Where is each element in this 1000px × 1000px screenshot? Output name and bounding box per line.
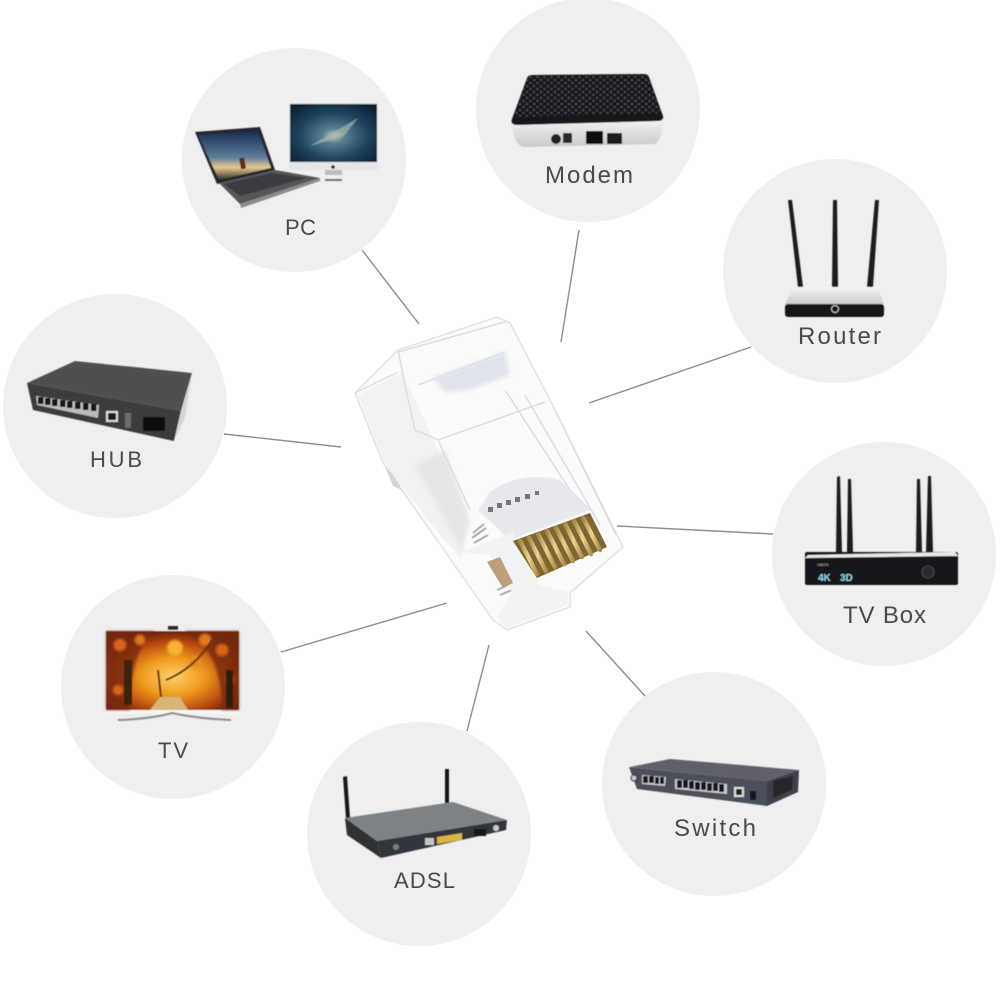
icon: transparent RJ45 connector bbox=[355, 317, 623, 630]
label: Modem: Modem bbox=[545, 162, 633, 189]
clip tab bbox=[385, 467, 402, 490]
label: TV Box: TV Box bbox=[843, 602, 926, 629]
gold contact pins bbox=[513, 513, 607, 578]
panel: Switch bbox=[602, 672, 826, 896]
panel: HUB bbox=[3, 294, 227, 518]
label: TV: TV bbox=[158, 738, 188, 763]
icon: ADSL router bbox=[343, 769, 507, 858]
icon: network switch bbox=[629, 759, 799, 806]
panel: Modem bbox=[476, 0, 700, 222]
panel: ADSL bbox=[307, 722, 531, 946]
side gold contact bbox=[487, 557, 513, 588]
label: ADSL: ADSL bbox=[394, 868, 455, 893]
icon: desktop monitor bbox=[289, 103, 378, 181]
icon: TV box: OBOX bbox=[817, 562, 829, 567]
panel: TV bbox=[61, 575, 285, 799]
icon: TV box: 3D bbox=[840, 573, 853, 584]
upper translucent reflection bbox=[432, 352, 510, 392]
side wires bbox=[472, 524, 512, 595]
panel: PC bbox=[182, 48, 406, 272]
upper housing edges bbox=[355, 322, 616, 535]
contact window bbox=[478, 477, 590, 540]
icon: TV box bbox=[805, 476, 958, 585]
label: Router: Router bbox=[798, 323, 881, 350]
icon: modem bbox=[512, 74, 663, 147]
label: HUB: HUB bbox=[90, 447, 142, 472]
panel: Router bbox=[723, 159, 947, 383]
icon: television bbox=[105, 626, 240, 720]
label: Switch: Switch bbox=[674, 815, 756, 842]
panel: TV Box bbox=[772, 442, 996, 666]
icon: router bbox=[785, 200, 884, 317]
left latch bbox=[358, 372, 466, 560]
connector lines bbox=[224, 230, 773, 731]
icon: laptop bbox=[195, 127, 320, 208]
lower housing bbox=[462, 532, 568, 628]
label: PC: PC bbox=[285, 215, 316, 240]
icon: network hub bbox=[27, 361, 192, 441]
icon: TV box: 4K bbox=[818, 573, 832, 584]
